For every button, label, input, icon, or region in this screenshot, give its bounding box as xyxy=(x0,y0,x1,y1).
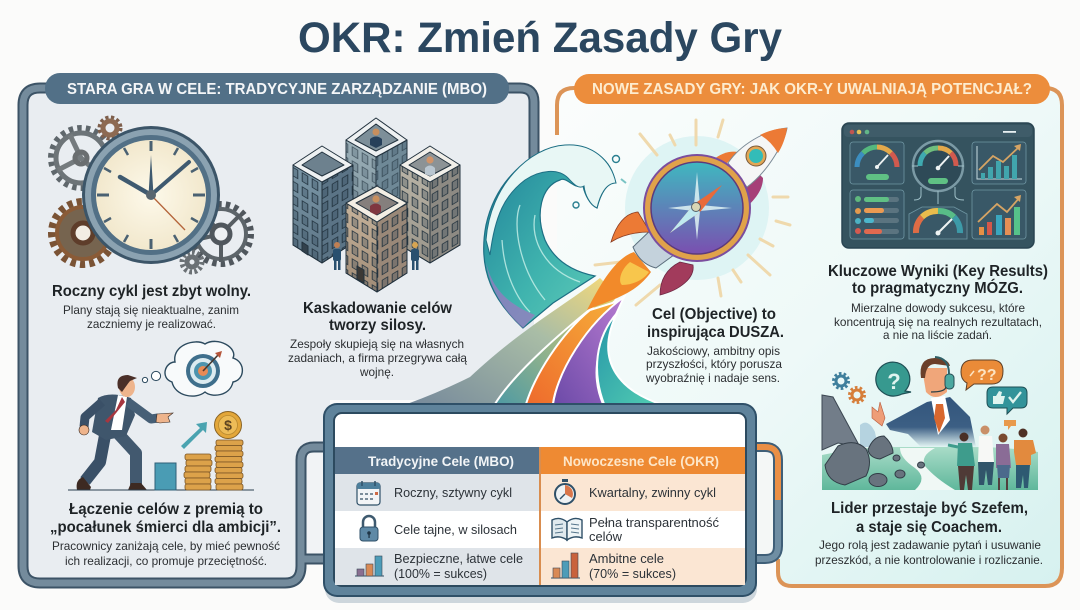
text: leader as coach: Lider przestaje być Szefem, xyxy=(831,500,1028,517)
icon: orange bubble xyxy=(961,360,1003,390)
row: annual cycle xyxy=(335,474,539,511)
icon: question bubble: ? xyxy=(887,369,901,394)
text: annual cycle: Roczny cykl jest zbyt wolny. xyxy=(52,283,251,300)
table frame xyxy=(323,403,757,603)
icon: clock xyxy=(82,126,220,264)
icon: halo xyxy=(625,136,769,280)
icon: gauges xyxy=(857,141,964,236)
row: ambitious goals: Ambitne cele xyxy=(589,551,664,566)
row: ambitious goals: (70% = sukces) xyxy=(589,566,676,581)
chart: lower trend xyxy=(978,195,1021,235)
row: quarterly cycle xyxy=(541,474,745,511)
illustration: rocket with compass xyxy=(587,120,790,310)
row: quarterly cycle: Kwartalny, zwinny cykl xyxy=(589,485,716,500)
text: bonus: ich realizacji, co promuje przeciętność. xyxy=(65,554,267,568)
icon: green ribbon xyxy=(597,313,660,404)
arrow: rising xyxy=(181,422,207,449)
text: annual cycle: zaczniemy je realizować. xyxy=(87,317,216,331)
icon: landscape xyxy=(822,395,1038,490)
panel header: right: NOWE ZASADY GRY: JAK OKR-Y UWALNIAJĄ POTENCJAŁ? xyxy=(592,81,1032,98)
illustration: wave and colour streams xyxy=(407,145,660,404)
title: OKR: Zmień Zasady Gry xyxy=(298,14,782,62)
icon: wave xyxy=(484,145,626,328)
text: objective: inspirująca DUSZA. xyxy=(647,324,784,341)
panel header: left: STARA GRA W CELE: TRADYCYJNE ZARZĄDZANIE (MBO) xyxy=(67,81,487,98)
icon: dollar coin: $ xyxy=(224,417,232,433)
text: bonus: Pracownicy zaniżają cele, by mieć pewność xyxy=(52,539,280,553)
text: annual cycle xyxy=(52,283,251,331)
text: cascading: wojnę. xyxy=(359,365,394,379)
text: key results: koncentrują się na realnych rezultatach, xyxy=(834,315,1042,329)
row: secret goals xyxy=(335,511,539,548)
column header: OKR: Nowoczesne Cele (OKR) xyxy=(563,454,719,469)
text: leader as coach xyxy=(815,500,1043,567)
icon: thought cloud with target xyxy=(142,341,242,396)
icon: teal ribbon xyxy=(495,292,616,404)
icon: small people xyxy=(333,242,419,270)
text: bonus: Łączenie celów z premią to xyxy=(69,501,263,518)
icon: gray ribbon xyxy=(407,278,612,404)
text: objective xyxy=(645,306,784,385)
text: cascading: Zespoły skupieją się na własnych xyxy=(290,337,464,351)
illustration: coach leader xyxy=(822,357,1038,490)
illustration: clock and gears xyxy=(52,118,250,272)
icon: question bubble xyxy=(876,362,911,396)
illustration: silo buildings xyxy=(293,118,460,292)
icon: purple ribbon xyxy=(553,297,624,404)
text: cascading: Kaskadowanie celów xyxy=(303,300,453,317)
row: transparency: celów xyxy=(589,529,623,544)
column: modern goals xyxy=(541,447,745,585)
row: transparency: Pełna transparentność xyxy=(589,515,719,530)
icon: blue bar xyxy=(155,463,176,490)
text: key results: a nie na liście zadań. xyxy=(883,328,992,342)
text: leader as coach: Jego rolą jest zadawanie pytań i usuwanie xyxy=(819,538,1041,552)
icon: orange bubble: ?? xyxy=(977,367,997,384)
column divider xyxy=(539,447,541,585)
panel header: left xyxy=(45,73,509,104)
column: traditional goals xyxy=(335,447,539,585)
text: cascading: tworzy silosy. xyxy=(329,317,426,334)
text: key results: Kluczowe Wyniki (Key Results) xyxy=(828,263,1048,280)
row: transparency xyxy=(541,511,745,548)
text: objective: Jakościowy, ambitny opis xyxy=(647,344,780,358)
icon: small gears xyxy=(834,374,864,402)
icon: left building xyxy=(293,146,353,263)
icon: gears xyxy=(52,118,250,272)
comparison table xyxy=(323,403,757,603)
panel frame: left xyxy=(23,88,534,583)
icon: back building xyxy=(346,118,407,260)
row: safe goals: Bezpieczne, łatwe cele xyxy=(394,551,523,566)
text: bonus xyxy=(50,501,281,568)
icon: coin stacks xyxy=(184,440,243,490)
illustration: businessman and coins xyxy=(68,341,254,490)
text: bonus: „pocałunek śmierci dla ambicji”. xyxy=(50,519,281,536)
text: leader as coach: a staje się Coachem. xyxy=(856,519,1002,536)
icon: ground line xyxy=(68,490,254,491)
icon: flame xyxy=(587,252,651,310)
panel header: right xyxy=(574,74,1050,104)
row: safe goals: (100% = sukces) xyxy=(394,566,487,581)
column header: MBO: Tradycyjne Cele (MBO) xyxy=(368,454,514,469)
illustration: dashboard xyxy=(842,123,1034,248)
text: objective: wyobraźnię i nadaje sens. xyxy=(645,371,780,385)
panel: old game (MBO) xyxy=(23,73,534,583)
text: cascading: zadaniach, a firma przegrywa całą xyxy=(288,351,467,365)
icon: dashboard frame xyxy=(842,123,1034,248)
column header: OKR xyxy=(541,447,745,474)
text: leader as coach: przeszkód, a nie kontrolowanie i rozliczanie. xyxy=(815,553,1043,567)
text: key results xyxy=(828,263,1048,342)
icon: rocket body xyxy=(611,128,787,295)
icon: rays xyxy=(595,120,790,305)
column header: MBO xyxy=(335,447,539,474)
icon: boulders xyxy=(825,436,924,486)
text: objective: Cel (Objective) to xyxy=(652,306,776,323)
chart: upper trend xyxy=(977,144,1022,179)
icon: progress bars xyxy=(855,196,899,234)
text: key results: Mierzalne dowody sukcesu, które xyxy=(851,301,1025,315)
text: annual cycle: Plany stają się nieaktualne, zanim xyxy=(63,303,239,317)
row: safe goals xyxy=(335,548,539,585)
panel: new rules (OKR) xyxy=(557,74,1062,586)
text: cascading xyxy=(288,300,467,379)
icon: orange ribbon xyxy=(526,300,622,404)
icon: businessman xyxy=(77,375,173,490)
icon: team of people xyxy=(948,420,1036,490)
icon: compass xyxy=(644,155,750,261)
icon: front building xyxy=(346,186,407,292)
row: secret goals: Cele tajne, w silosach xyxy=(394,522,517,537)
row: ambitious goals xyxy=(541,548,745,585)
row: annual cycle: Roczny, sztywny cykl xyxy=(394,485,512,500)
text: objective: przyszłości, który porusza xyxy=(646,357,782,371)
icon: feedback bubble xyxy=(987,387,1027,414)
panel frame: right xyxy=(557,88,1062,586)
icon: right building xyxy=(400,146,460,263)
icon: dollar coin xyxy=(214,412,242,438)
icon: coach xyxy=(872,357,976,447)
text: key results: to pragmatyczny MÓZG. xyxy=(852,278,1023,297)
